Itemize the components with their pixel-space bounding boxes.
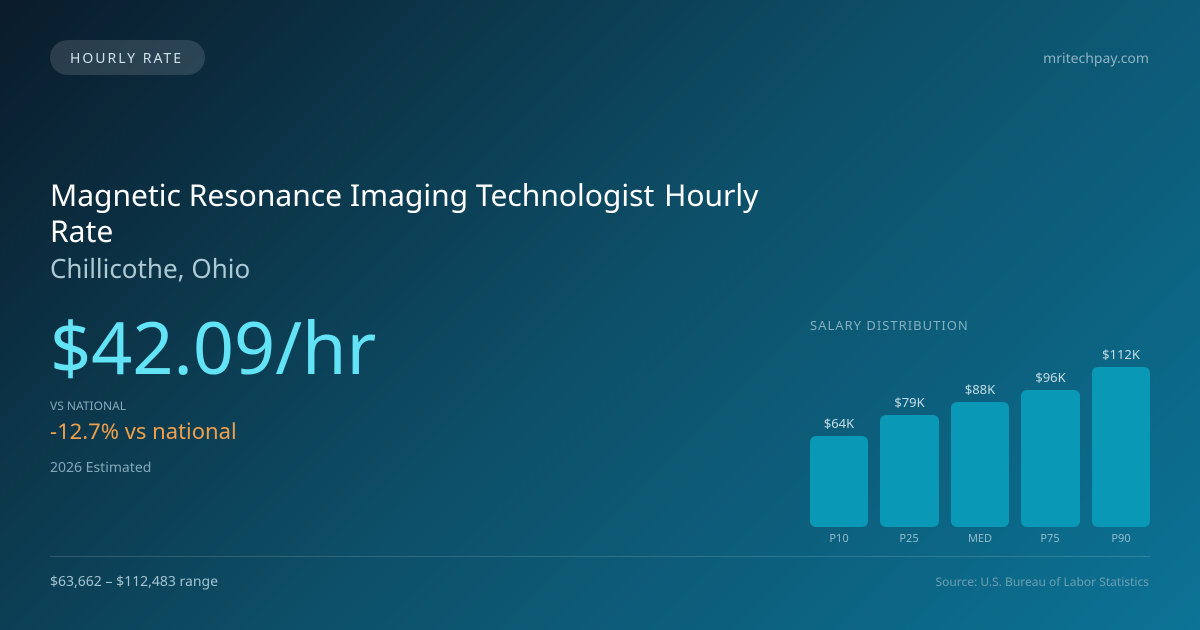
badge: hourly rate: [50, 40, 205, 75]
badge: hourly rate: HOURLY RATE: [70, 49, 183, 68]
bar: P25: $79K: [894, 393, 925, 411]
bar: MED: [951, 380, 1009, 527]
bar: P25: [880, 393, 939, 527]
site name: mritechpay.com: [1043, 49, 1149, 68]
salary range: $63,662 – $112,483 range: [50, 572, 218, 591]
title: Magnetic Resonance Imaging Technologist Hourly Rate: [50, 174, 758, 251]
location subtitle: Chillicothe, Ohio: [50, 250, 250, 286]
bar: P75: $96K: [1035, 368, 1066, 386]
main hourly figure: $42.09/hr: [50, 298, 376, 396]
bar: P10: $64K: [824, 414, 854, 432]
bar: P75: [1021, 368, 1080, 527]
bar: P90: [1092, 345, 1150, 527]
estimate year: 2026 Estimated: [50, 458, 151, 477]
label: P10: P10: [829, 531, 849, 546]
label: P90: P90: [1111, 531, 1131, 546]
label: MED: MED: [968, 531, 992, 546]
bar: P10: [810, 414, 868, 527]
source: Source: U.S. Bureau of Labor Statistics: [936, 573, 1149, 590]
label: P75: P75: [1040, 531, 1060, 546]
comparison label: VS NATIONAL: [50, 397, 126, 414]
bar: MED: $88K: [965, 380, 995, 398]
comparison value: -12.7% vs national: [50, 416, 237, 446]
label: P25: P25: [899, 531, 919, 546]
chart heading: SALARY DISTRIBUTION: [810, 316, 969, 334]
bar: P90: $112K: [1102, 345, 1140, 363]
